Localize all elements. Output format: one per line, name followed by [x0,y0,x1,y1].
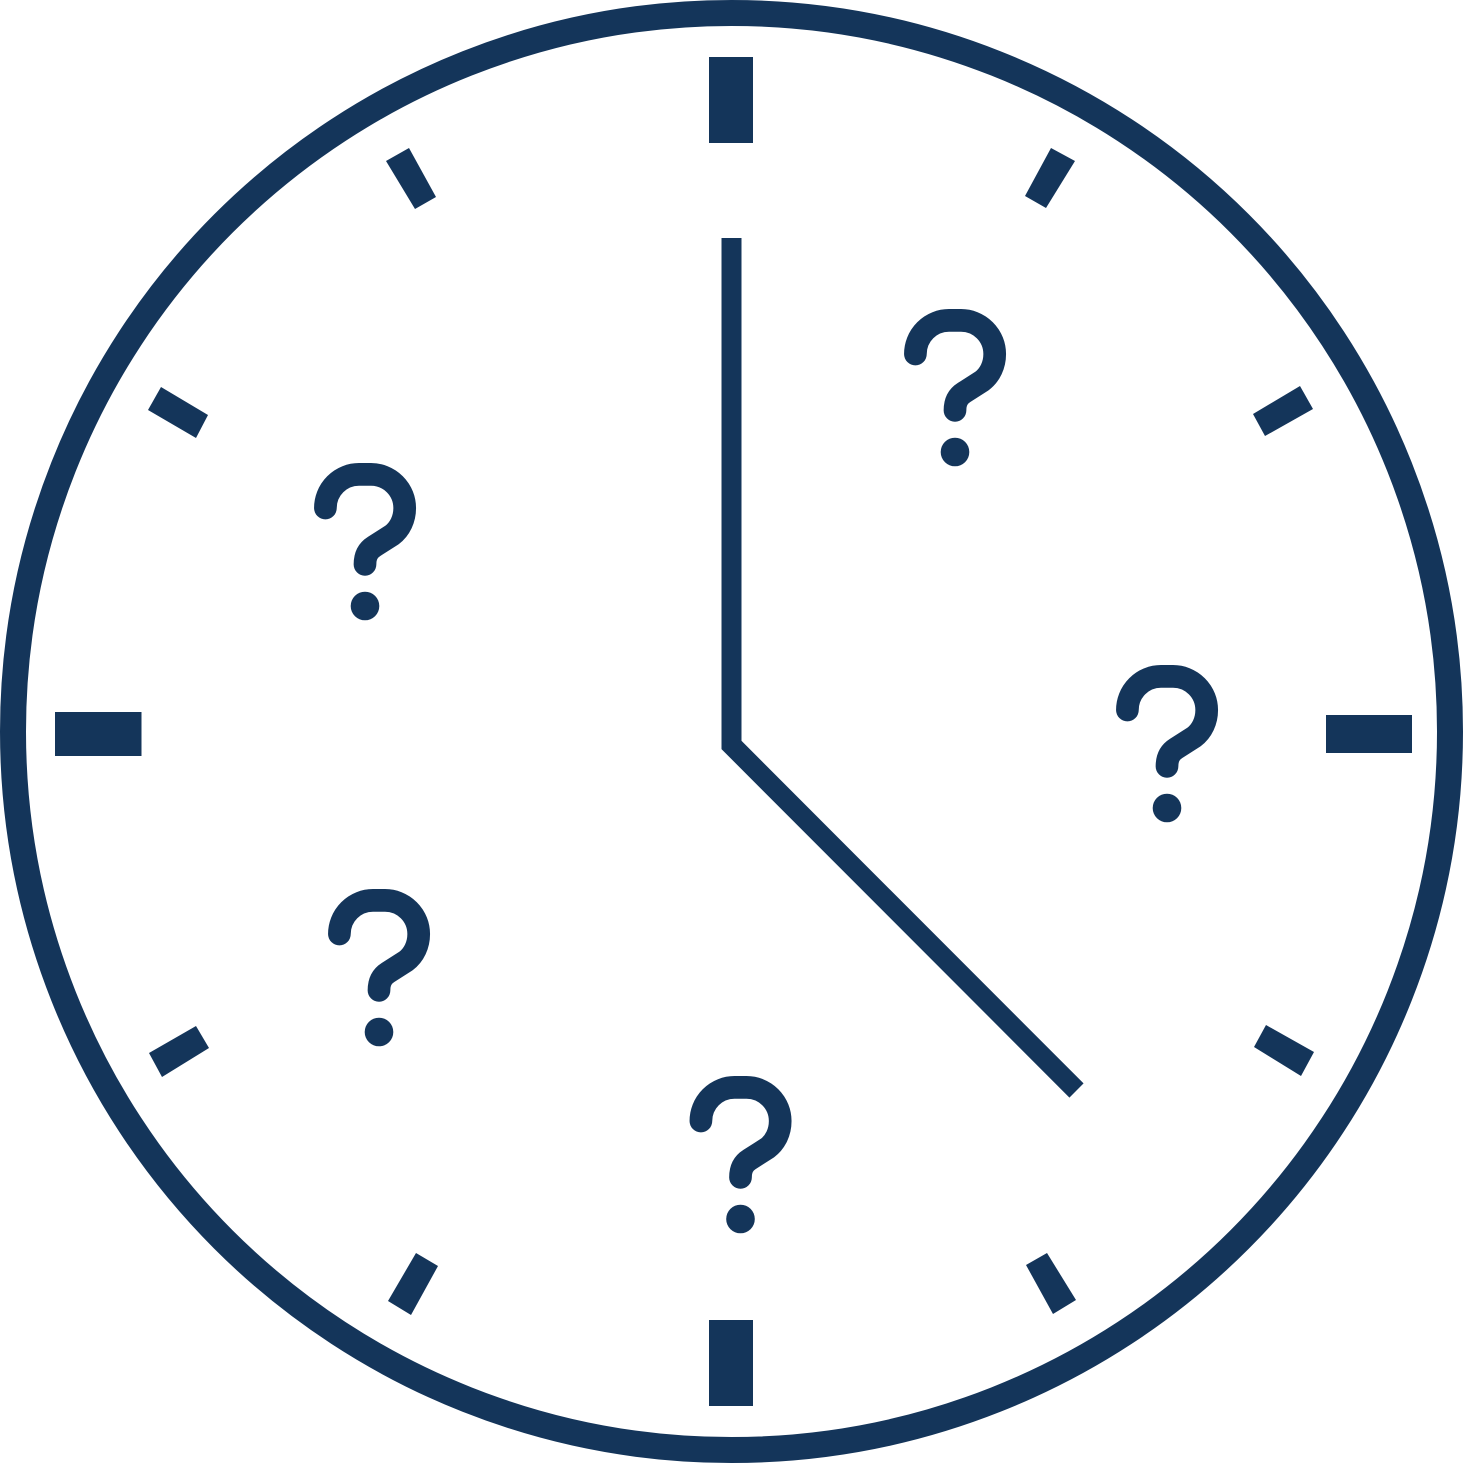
clock hands [732,238,1076,1090]
icon: question mark bottom [701,1087,780,1233]
icon: question mark left [325,474,405,620]
icon: question mark lower left [339,900,419,1046]
icon: question mark upper right [915,320,995,466]
icon: question mark right [1127,676,1207,822]
